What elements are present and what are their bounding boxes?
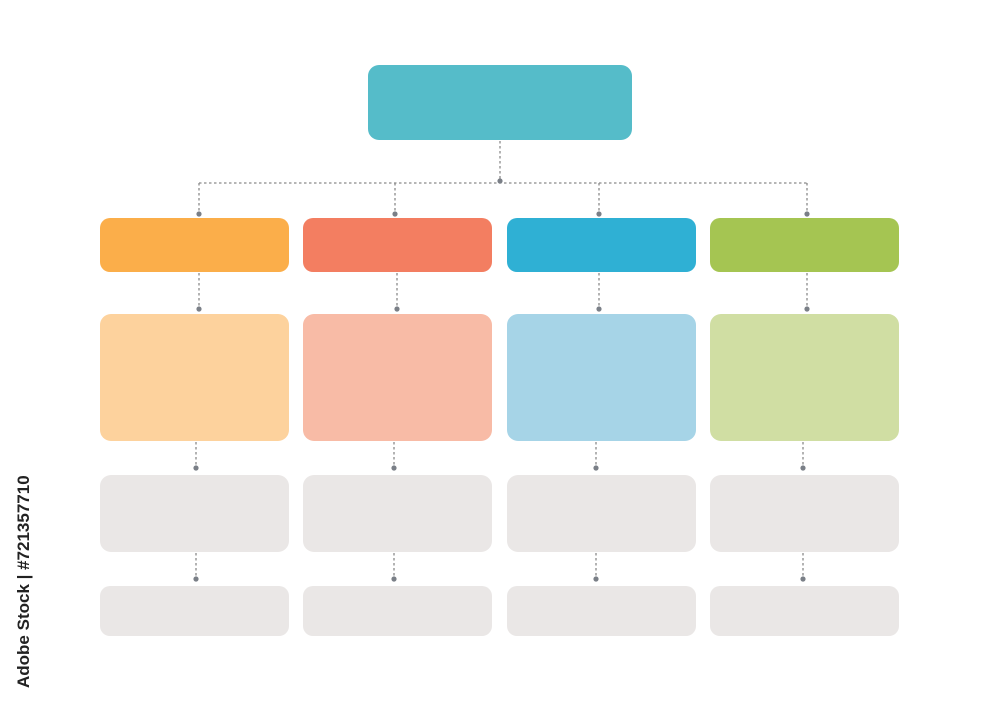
row 2 content boxes — [100, 314, 899, 441]
connectors: top to row 1 — [196, 141, 807, 579]
top box — [368, 65, 632, 140]
row 4 grey boxes — [100, 586, 899, 636]
connector dots — [193, 178, 810, 582]
row 3 grey boxes — [100, 475, 899, 552]
row 1 header boxes — [100, 218, 899, 272]
side watermark text: Adobe Stock | #721357710 — [14, 475, 33, 688]
